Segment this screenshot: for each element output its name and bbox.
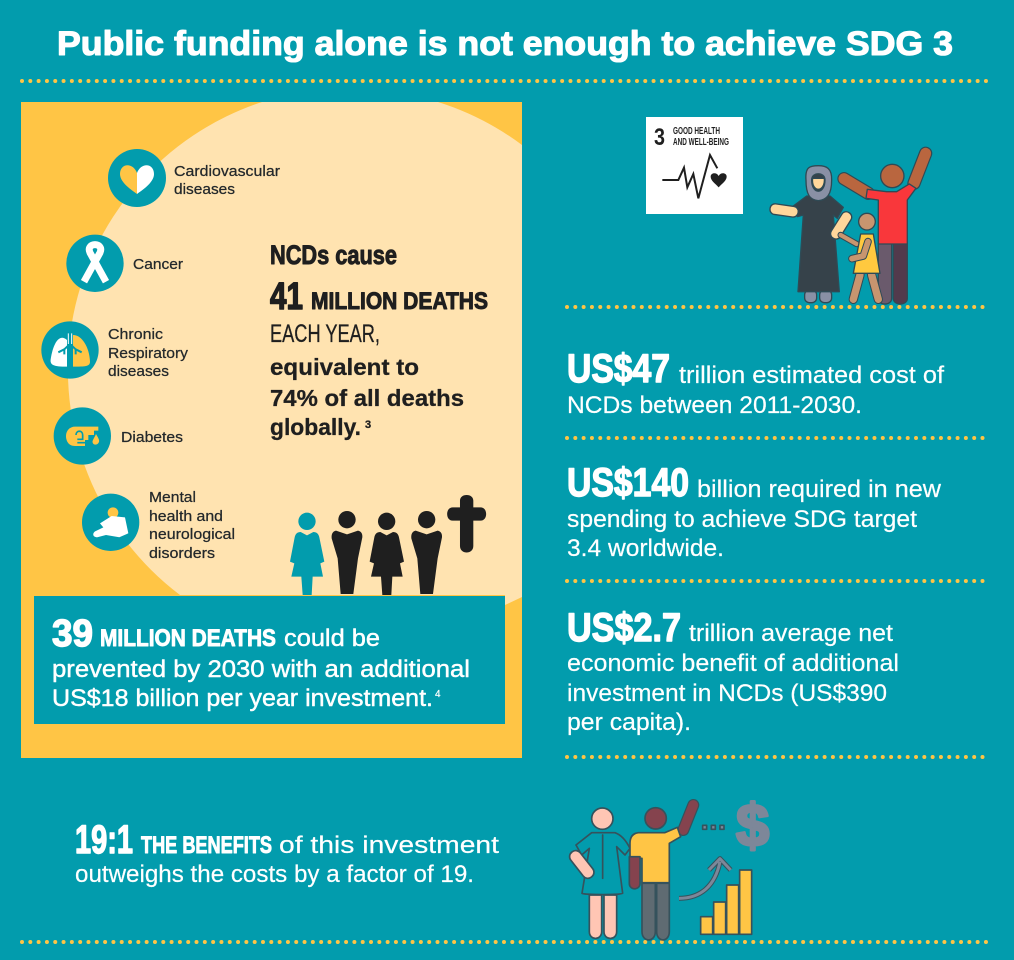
panel: NCD deaths — [21, 102, 522, 758]
label: chronic respiratory: Respiratory — [108, 345, 189, 362]
icon: family — [769, 153, 926, 304]
label: mental health: disorders — [149, 545, 215, 562]
NCD headline text: 41 — [270, 276, 303, 318]
stat: US$140 billion: spending to achieve SDG target — [567, 506, 917, 533]
stat: US$47 trillion: NCDs between 2011-2030. — [567, 392, 862, 419]
stat: US$47 trillion — [567, 347, 944, 419]
label: diabetes: Diabetes — [121, 429, 183, 446]
icon: heart — [108, 149, 166, 207]
icon: ribbon — [66, 235, 124, 292]
callout: 39 million deaths — [34, 596, 505, 724]
stat: US$140 billion: billion required in new — [697, 476, 941, 503]
child — [841, 213, 880, 299]
icon: investors and growth — [567, 791, 769, 940]
icon: people and cross — [290, 495, 486, 595]
icon: SDG 3 badge — [646, 117, 743, 214]
woman — [567, 808, 630, 938]
stat: US$47 trillion: US$47 — [567, 347, 670, 391]
NCD headline text — [270, 240, 488, 440]
stat: US$2.7 trillion: investment in NCDs (US$390 — [567, 680, 887, 707]
stat: 19:1 benefits — [75, 818, 499, 888]
NCD headline text: 74% of all deaths — [270, 385, 464, 411]
stat: 19:1 benefits: of this investment — [279, 832, 499, 859]
label: cardiovascular — [174, 163, 280, 198]
icon: woman — [370, 513, 404, 595]
icon: lungs — [41, 321, 99, 379]
stat: 19:1 benefits: THE BENEFITS — [141, 832, 272, 859]
callout: 39 million deaths: prevented by 2030 with an additional — [52, 656, 470, 683]
icon: diabetes — [54, 407, 111, 465]
panel background circle — [68, 102, 522, 605]
stat: US$140 billion — [567, 461, 941, 562]
NCD headline text: equivalent to — [270, 354, 419, 380]
NCD headline text: 3 — [365, 419, 371, 431]
stat: US$140 billion: US$140 — [567, 461, 689, 505]
man — [844, 153, 926, 304]
callout: 39 million deaths: MILLION DEATHS — [100, 625, 276, 652]
dots — [703, 825, 724, 829]
growth arrow — [679, 859, 731, 898]
bar chart — [701, 870, 752, 934]
label: chronic respiratory: diseases — [108, 363, 169, 380]
icon: woman teal — [290, 513, 324, 595]
stat: 19:1 benefits: 19:1 — [75, 818, 133, 862]
icon: man — [332, 511, 362, 594]
icon: man — [411, 511, 442, 594]
label: mental health: Mental — [149, 489, 196, 506]
icon: mental health — [82, 494, 139, 551]
callout: 39 million deaths: 4 — [435, 689, 441, 700]
label: chronic respiratory — [108, 326, 189, 380]
callout: 39 million deaths: could be — [284, 625, 380, 652]
label: mental health: health and — [149, 508, 223, 525]
stat: US$2.7 trillion: per capita). — [567, 709, 691, 736]
label: chronic respiratory: Chronic — [108, 326, 164, 343]
callout: 39 million deaths: US$18 billion per year investment. — [52, 685, 433, 712]
title: Public funding alone is not enough to achieve SDG 3 — [57, 25, 953, 63]
man — [629, 805, 693, 940]
stat: US$2.7 trillion: US$2.7 — [567, 606, 681, 650]
label: cardiovascular: Cardiovascular — [174, 163, 280, 180]
icon: SDG 3 badge: AND WELL-BEING — [673, 137, 729, 148]
callout: 39 million deaths: 39 — [52, 613, 93, 655]
icon: cross — [447, 495, 486, 552]
woman — [769, 166, 854, 303]
dollar sign: $ — [736, 791, 769, 858]
label: cardiovascular: diseases — [174, 181, 235, 198]
label: mental health: neurological — [149, 526, 235, 543]
label: cancer: Cancer — [133, 256, 183, 273]
stat: US$47 trillion: trillion estimated cost of — [679, 362, 944, 389]
icon: SDG 3 badge: 3 — [654, 124, 665, 151]
stat: US$2.7 trillion: economic benefit of additional — [567, 650, 899, 677]
label: mental health — [149, 489, 235, 562]
NCD headline text: NCDs cause — [270, 240, 397, 270]
NCD headline text: EACH YEAR, — [270, 320, 380, 348]
stat: 19:1 benefits: outweighs the costs by a factor of 19. — [75, 861, 474, 888]
stat: US$2.7 trillion: trillion average net — [689, 620, 893, 647]
stat: US$140 billion: 3.4 worldwide. — [567, 535, 724, 562]
NCD headline text: globally. — [270, 414, 361, 440]
stat: US$2.7 trillion — [567, 606, 899, 736]
NCD headline text: MILLION DEATHS — [311, 288, 488, 315]
icon: SDG 3 badge: GOOD HEALTH — [673, 126, 720, 137]
